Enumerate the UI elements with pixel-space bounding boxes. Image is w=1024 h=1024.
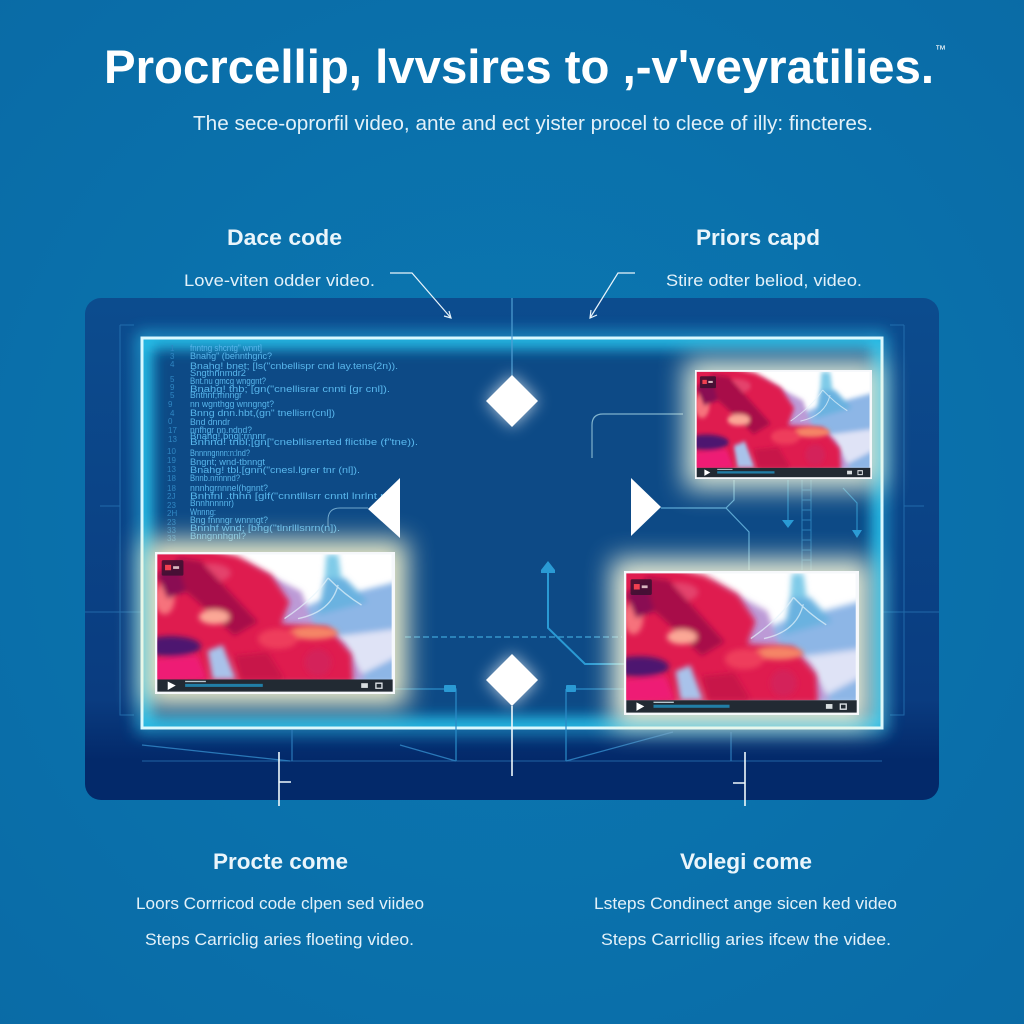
title: ™ bbox=[935, 44, 946, 56]
code listing: 23 bbox=[167, 518, 176, 527]
icon: left arrow bbox=[368, 478, 400, 538]
code listing: Bnhfnl .thhn [glf("cnntlllsrr cnntl lnrlnt n(l). bbox=[190, 491, 400, 501]
code listing: Bnnnngnnn:n:lnd? bbox=[190, 448, 250, 458]
code listing: 4 bbox=[170, 360, 175, 369]
code listing: 13 bbox=[167, 465, 176, 474]
text block: lower right: Volegi come bbox=[680, 849, 812, 874]
code listing: 10 bbox=[167, 447, 176, 456]
code listing: Bnngnnhgnl? bbox=[190, 531, 246, 541]
text block: lower right bbox=[594, 849, 897, 949]
heading: left top: Dace code bbox=[227, 225, 342, 250]
code listing: Bnnhf wnd; [bhg("tlnrlllsnrn(n]). bbox=[190, 523, 340, 533]
heading: right top: Priors capd bbox=[696, 225, 820, 250]
connector lines bbox=[142, 298, 857, 761]
code listing: nnnhgrnnnel(hgnnt? bbox=[190, 483, 268, 493]
code listing: 2J bbox=[167, 492, 175, 501]
code listing: Bnahg" (bennthgnc? bbox=[190, 351, 272, 361]
code listing: 3 bbox=[170, 352, 175, 361]
code listing: Bnahg! tbl.[gnn("cnesl.lgrer tnr (nl]). bbox=[190, 465, 360, 475]
icon: small connector arrows and nodes bbox=[444, 520, 862, 692]
text block: lower left: Procte come bbox=[213, 849, 348, 874]
panel: main dark board bbox=[85, 298, 939, 800]
text block: lower left: Loors Corrricod code clpen sed viideo bbox=[136, 894, 424, 913]
code listing: Sngthnnmdr2 bbox=[190, 368, 246, 378]
heading: right top: Stire odter beliod, video. bbox=[666, 271, 862, 290]
text block: lower left: Steps Carriclig aries floeting video. bbox=[145, 930, 414, 949]
code listing: 5 bbox=[170, 391, 175, 400]
icon: top diamond bbox=[486, 375, 538, 427]
code listing bbox=[167, 343, 418, 543]
code listing: 18 bbox=[167, 484, 176, 493]
callout arrow: right bbox=[590, 273, 635, 318]
code listing: 5 bbox=[170, 375, 175, 384]
code listing: 23 bbox=[167, 501, 176, 510]
text block: lower right: Steps Carricllig aries ifcew the videe. bbox=[601, 930, 891, 949]
code listing: Bnahg! bngl;rnnnr bbox=[190, 431, 266, 441]
lower marker lines bbox=[279, 706, 745, 806]
code listing: 17 bbox=[168, 426, 177, 435]
code listing: 1 bbox=[170, 344, 175, 353]
icon: bottom diamond bbox=[486, 654, 538, 706]
code listing: 4 bbox=[170, 409, 175, 418]
code listing: 9 bbox=[170, 383, 175, 392]
text block: lower right: Lsteps Condinect ange sicen ked video bbox=[594, 894, 897, 913]
code listing: 18 bbox=[167, 474, 176, 483]
heading: left top: Love-viten odder video. bbox=[184, 271, 375, 290]
code listing: Bnahg! thb; [gn("cnellisrar cnnti [gr cnl]). bbox=[190, 384, 390, 394]
video thumbnail: top right bbox=[684, 360, 882, 489]
code listing: Bnthnf;rnnngr bbox=[190, 390, 242, 400]
code listing: 2H bbox=[167, 509, 177, 518]
code listing: nnfhgr nn.ndnd? bbox=[190, 425, 252, 435]
code listing: 13 bbox=[168, 435, 177, 444]
code listing: Bnnhnnnnr) bbox=[190, 498, 234, 508]
code listing: Bnd dnndr bbox=[190, 417, 230, 427]
subtitle: The sece-oprorfil video, ante and ect yister procel to clece of illy: fincteres. bbox=[193, 113, 873, 135]
heading: left top bbox=[184, 225, 375, 290]
code listing: Bng fnnngr wnnngt? bbox=[190, 515, 268, 525]
code listing: 33 bbox=[167, 534, 176, 543]
code listing: 33 bbox=[167, 526, 176, 535]
icon: right arrow bbox=[631, 478, 661, 536]
text block: lower left bbox=[136, 849, 424, 949]
code listing: Bnhnd! tnbl;[gn["cnebllisrerted flictibe (f"tne)). bbox=[190, 437, 418, 447]
code listing: fnntng shcntg" wnnt] bbox=[190, 343, 262, 353]
heading: right top bbox=[666, 225, 862, 290]
title: Procrcellip, lvvsires to ,-v'veyratilies. bbox=[104, 40, 934, 93]
code listing: Bnt.nu gmcg wnggnt? bbox=[190, 376, 266, 386]
code listing: 19 bbox=[167, 456, 176, 465]
video thumbnail: left bbox=[141, 540, 407, 706]
code listing: Bnng dnn.hbt,(gn" tnellisrr(cnl]) bbox=[190, 408, 335, 418]
callout arrow: left bbox=[390, 273, 451, 318]
video thumbnail: bottom right bbox=[610, 559, 871, 727]
code listing: Bnnb.nnnnnd? bbox=[190, 473, 240, 483]
code listing: Wnnng: bbox=[190, 507, 216, 517]
code listing: Bngnt; wnd-tbnngt bbox=[190, 457, 266, 467]
code listing: 9 bbox=[168, 400, 173, 409]
code listing: Bnahg! bnet; [ls("cnbellispr cnd lay.tens(2n)). bbox=[190, 361, 398, 371]
code listing: 0 bbox=[168, 417, 173, 426]
code listing: nn wgnthgg wnngngt? bbox=[190, 399, 274, 409]
glowing frame bbox=[142, 338, 882, 728]
